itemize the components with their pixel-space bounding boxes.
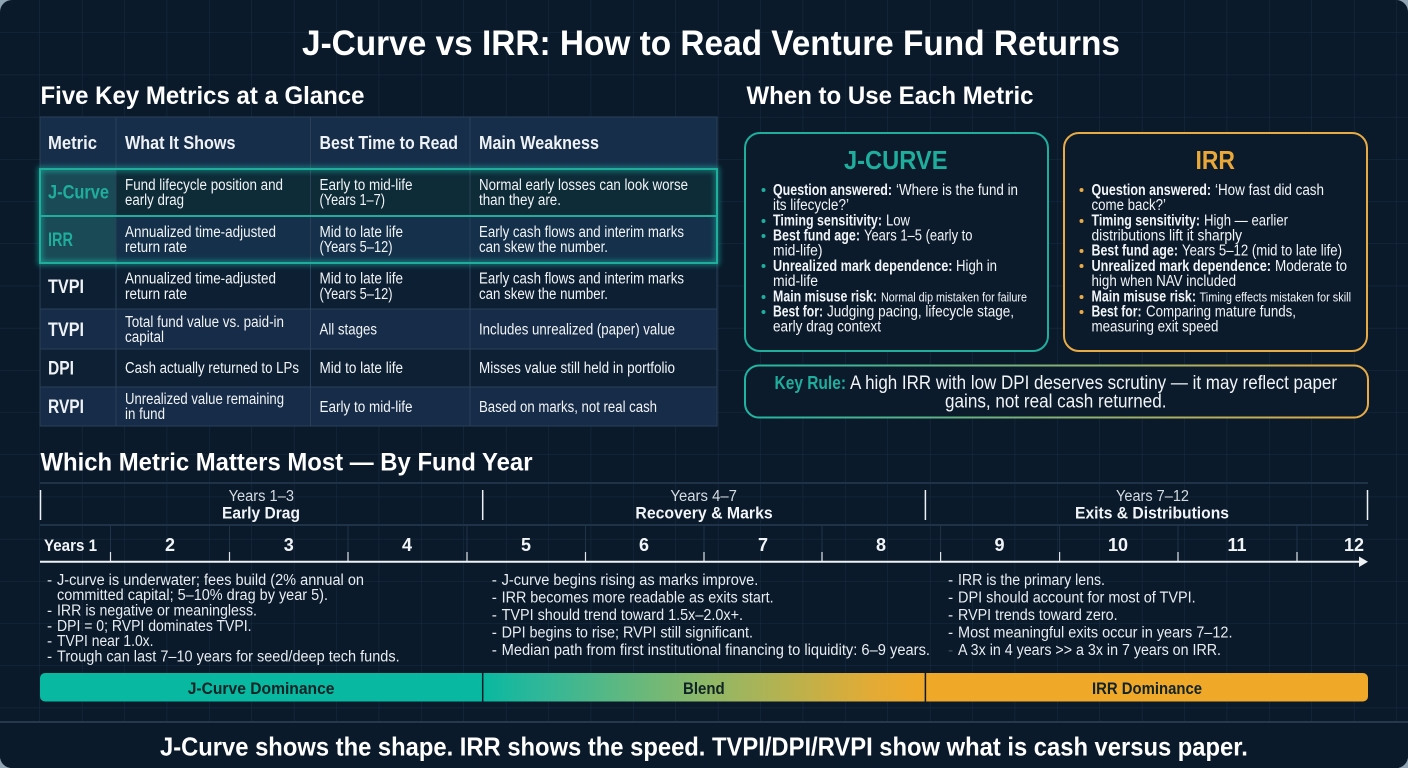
row: TVPI (second) <box>48 314 675 346</box>
card list: Best fund age: <box>773 228 860 244</box>
card list: High in <box>956 258 997 275</box>
year labels: 4 <box>402 535 412 555</box>
timeline <box>40 483 1368 702</box>
card list: Unrealized mark dependence: <box>1092 258 1271 275</box>
row: J-Curve: than they are. <box>479 192 561 209</box>
row: J-Curve <box>48 177 688 209</box>
row: TVPI (second): capital <box>125 329 164 346</box>
card list: come back?’ <box>1092 197 1166 214</box>
row: IRR: IRR <box>48 230 73 251</box>
row: RVPI: RVPI <box>48 397 84 418</box>
card list: Years 5–12 (mid to late life) <box>1182 242 1342 260</box>
table header row <box>48 133 599 153</box>
row: IRR: (Years 5–12) <box>320 239 392 256</box>
row: TVPI (first): (Years 5–12) <box>320 286 392 303</box>
year labels: Years 1 <box>44 536 97 555</box>
card list: Question answered: <box>1092 182 1211 199</box>
row: DPI: Cash actually returned to LPs <box>125 360 299 377</box>
row: J-Curve: Early to mid-life <box>320 177 412 194</box>
dominance bar <box>40 673 1368 702</box>
phase label: early drag <box>222 488 300 522</box>
card list: Low <box>886 212 911 230</box>
row: TVPI (first): return rate <box>125 286 187 303</box>
notes: years 4-7: IRR becomes more readable as exits start. <box>502 590 774 606</box>
heading: when to use each metric: When to Use Each Metric <box>746 82 1034 110</box>
year labels: 9 <box>994 535 1005 555</box>
card list: ‘How fast did cash <box>1215 182 1324 199</box>
card list: Main misuse risk: <box>1092 288 1196 306</box>
table header row: Metric <box>48 133 97 153</box>
notes: years 7-12 <box>948 572 1232 659</box>
row: RVPI <box>48 391 657 423</box>
callout: key rule: A high IRR with low DPI deserves scrutiny — it may reflect paper <box>850 373 1338 394</box>
phase label: recovery and marks <box>635 488 773 522</box>
row: TVPI (first): TVPI <box>48 277 84 298</box>
notes: years 4-7: - <box>492 642 497 659</box>
notes: years 7-12: - <box>948 572 953 589</box>
row: IRR: can skew the number. <box>479 239 608 256</box>
notes: years 1-3: J-curve is underwater; fees build (2% annual on <box>57 572 364 589</box>
year labels: 7 <box>758 535 768 555</box>
card list: high when NAV included <box>1092 273 1236 290</box>
bullet markers <box>762 188 766 314</box>
card list: Question answered: <box>773 182 892 199</box>
notes: years 1-3: - <box>47 633 52 650</box>
notes: years 7-12: - <box>948 590 953 606</box>
notes: years 4-7: J-curve begins rising as marks improve. <box>502 572 758 589</box>
callout: key rule: gains, not real cash returned. <box>945 392 1166 412</box>
notes: years 4-7: - <box>492 607 497 624</box>
heading: which metric matters most: Which Metric Matters Most — By Fund Year <box>40 448 533 476</box>
card list: early drag context <box>773 318 882 336</box>
card list: Moderate to <box>1275 258 1347 275</box>
row: TVPI (second): Total fund value vs. paid-in <box>125 314 284 331</box>
year labels: 8 <box>876 535 886 555</box>
notes: years 1-3: - <box>47 648 52 666</box>
notes: years 7-12: DPI should account for most of TVPI. <box>958 590 1196 606</box>
notes: years 4-7: TVPI should trend toward 1.5x–2.0x+. <box>502 607 743 624</box>
row: J-Curve: Fund lifecycle position and <box>125 177 283 194</box>
year labels: 10 <box>1108 535 1128 555</box>
bullet markers <box>1080 188 1084 314</box>
phase label: recovery and marks: Years 4–7 <box>670 488 737 505</box>
row: IRR: Early cash flows and interim marks <box>479 224 684 241</box>
notes: years 7-12: A 3x in 4 years >> a 3x in 7 years on IRR. <box>958 642 1221 659</box>
row: TVPI (first): can skew the number. <box>479 286 608 303</box>
notes: years 1-3: DPI = 0; RVPI dominates TVPI. <box>57 618 252 635</box>
notes: years 4-7: - <box>492 624 497 642</box>
card list: Best for: <box>773 304 823 320</box>
panel: metrics table <box>40 117 717 426</box>
year axis with arrow <box>40 526 1368 567</box>
card list: Comparing mature funds, <box>1146 304 1296 320</box>
row: RVPI: in fund <box>125 406 165 423</box>
notes: years 7-12: IRR is the primary lens. <box>958 572 1105 589</box>
row: TVPI (first): Mid to late life <box>320 270 403 288</box>
bar label: IRR dominance: IRR Dominance <box>1092 679 1202 698</box>
card list: Best for: <box>1092 304 1142 320</box>
card list <box>773 182 1027 336</box>
card list: ‘Where is the fund in <box>896 182 1018 199</box>
notes: years 1-3: - <box>47 572 52 589</box>
panel: IRR card <box>1064 133 1367 351</box>
row: IRR: Annualized time-adjusted <box>125 224 276 241</box>
panel: J-Curve card <box>745 133 1048 351</box>
table header row: Best Time to Read <box>320 133 458 153</box>
notes: years 1-3: IRR is negative or meaningless. <box>57 602 257 620</box>
row: J-Curve: early drag <box>125 192 184 209</box>
notes: years 7-12: - <box>948 624 953 642</box>
phase label: exits and distributions: Exits & Distributions <box>1075 504 1229 522</box>
row: TVPI (first) <box>48 270 684 303</box>
card list: Unrealized mark dependence: <box>773 258 952 275</box>
row: IRR <box>48 224 684 256</box>
phase label: exits and distributions: Years 7–12 <box>1116 488 1189 505</box>
row: RVPI: Early to mid-life <box>320 399 412 416</box>
row: TVPI (first): Early cash flows and interim marks <box>479 270 684 288</box>
notes: years 4-7: DPI begins to rise; RVPI still significant. <box>502 624 753 642</box>
row: IRR: Mid to late life <box>320 224 403 241</box>
notes: years 4-7: Median path from first institutional financing to liquidity: 6–9 years. <box>502 642 930 659</box>
notes: years 1-3: TVPI near 1.0x. <box>57 633 154 650</box>
row: TVPI (second): All stages <box>320 322 377 338</box>
notes: years 1-3: committed capital; 5–10% drag by year 5). <box>57 587 328 604</box>
year labels: 6 <box>639 535 649 555</box>
notes: years 1-3: Trough can last 7–10 years for seed/deep tech funds. <box>57 648 400 666</box>
row highlight glow <box>40 169 717 263</box>
year labels: 5 <box>521 535 531 555</box>
title: J-Curve vs IRR: How to Read Venture Fund Returns <box>302 24 1120 63</box>
phase label: exits and distributions <box>1075 488 1229 522</box>
notes: years 7-12: - <box>948 607 953 624</box>
callout: key rule <box>745 366 1368 418</box>
row: RVPI: Unrealized value remaining <box>125 391 284 408</box>
card list: Timing sensitivity: <box>1092 212 1200 230</box>
notes: years 7-12: RVPI trends toward zero. <box>958 607 1118 624</box>
card list: Timing effects mistaken for skill <box>1200 290 1351 304</box>
year labels: 11 <box>1227 535 1247 555</box>
notes: years 4-7: - <box>492 590 497 606</box>
row: J-Curve: J-Curve <box>48 182 109 204</box>
card list: Timing sensitivity: <box>773 212 882 230</box>
phase label: early drag: Years 1–3 <box>229 488 294 505</box>
bar label: J-Curve dominance: J-Curve Dominance <box>188 679 334 698</box>
notes: years 7-12: - <box>948 642 953 659</box>
card list: its lifecycle?’ <box>773 197 849 214</box>
bar label: blend: Blend <box>683 679 725 698</box>
card list: distributions lift it sharply <box>1092 228 1242 244</box>
phase label: early drag: Early Drag <box>222 504 300 522</box>
callout: key rule: Key Rule: <box>774 373 846 393</box>
row: J-Curve: (Years 1–7) <box>320 192 385 209</box>
phase label: recovery and marks: Recovery & Marks <box>635 504 773 522</box>
card list: mid-life) <box>773 242 822 260</box>
card list: Main misuse risk: <box>773 288 877 306</box>
row: DPI: Misses value still held in portfolio <box>479 360 675 377</box>
heading: five key metrics: Five Key Metrics at a Glance <box>40 82 365 110</box>
notes: years 1-3: - <box>47 618 52 635</box>
card title: J-CURVE: J-CURVE <box>844 145 948 175</box>
notes: years 1-3 <box>47 572 400 666</box>
footer takeaway: J-Curve shows the shape. IRR shows the speed. TVPI/DPI/RVPI show what is cash versus paper. <box>160 732 1248 762</box>
notes: years 1-3: - <box>47 602 52 620</box>
notes: years 7-12: Most meaningful exits occur in years 7–12. <box>958 624 1232 642</box>
card list: Best fund age: <box>1092 242 1178 260</box>
year labels: 12 <box>1344 535 1364 555</box>
row: TVPI (second): TVPI <box>48 320 84 341</box>
year labels <box>44 535 1364 555</box>
card list <box>1092 182 1351 336</box>
card list: Normal dip mistaken for failure <box>881 290 1027 304</box>
row: J-Curve: Normal early losses can look worse <box>479 177 688 194</box>
card title: IRR: IRR <box>1196 145 1235 175</box>
card list: measuring exit speed <box>1092 318 1218 336</box>
card list: mid-life <box>773 273 818 290</box>
table header row: Main Weakness <box>479 133 599 153</box>
row: TVPI (second): Includes unrealized (paper) value <box>479 322 675 338</box>
row: RVPI: Based on marks, not real cash <box>479 399 657 416</box>
card list: Judging pacing, lifecycle stage, <box>827 304 1014 320</box>
row: IRR: return rate <box>125 239 187 256</box>
card list: High — earlier <box>1204 212 1288 230</box>
card list: Years 1–5 (early to <box>864 228 972 244</box>
row: TVPI (first): Annualized time-adjusted <box>125 270 276 288</box>
row: DPI: Mid to late life <box>320 360 403 377</box>
notes: years 4-7 <box>492 572 930 659</box>
notes: years 4-7: - <box>492 572 497 589</box>
row: DPI <box>48 358 675 380</box>
year labels: 3 <box>284 535 294 555</box>
table header row: What It Shows <box>125 133 236 153</box>
row: DPI: DPI <box>48 358 74 380</box>
year labels: 2 <box>165 535 175 555</box>
